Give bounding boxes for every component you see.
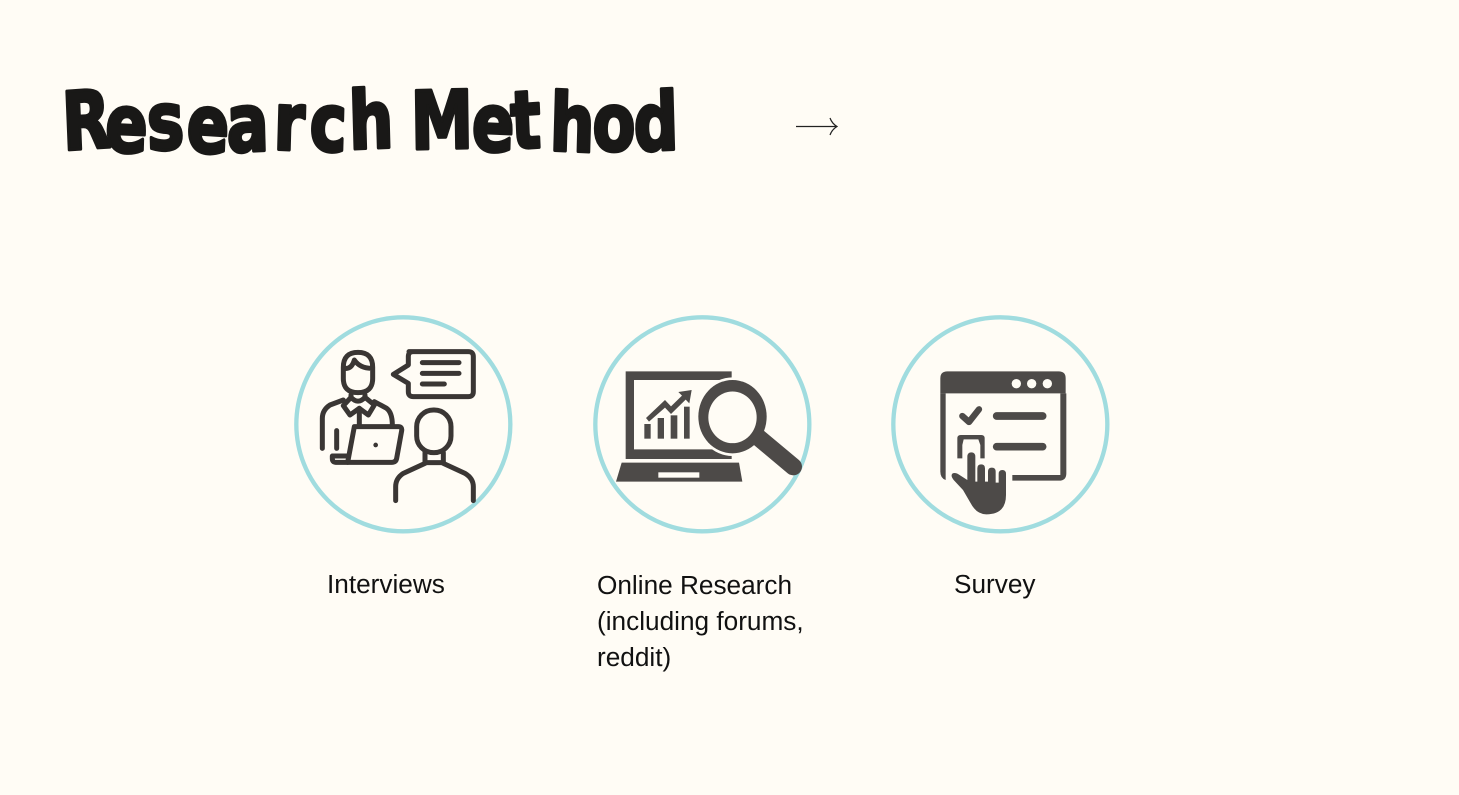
- title: Research Method: [60, 72, 680, 170]
- label: interviews: Interviews: [327, 569, 445, 599]
- label: online research: reddit): [597, 642, 671, 672]
- label: online research: (including forums,: [597, 606, 804, 636]
- label: online research: [597, 570, 804, 672]
- icon: laptop with magnifying glass: [593, 315, 812, 534]
- arrow: [796, 118, 838, 136]
- label: online research: Online Research: [597, 570, 792, 600]
- label: survey: Survey: [954, 569, 1036, 599]
- panel: survey: [891, 315, 1110, 599]
- panel: online research: [593, 315, 812, 672]
- icon: survey checklist with pointing hand: [891, 315, 1110, 534]
- panel: interviews: [294, 315, 512, 599]
- icon: interview with speech bubble and laptop: [294, 315, 512, 534]
